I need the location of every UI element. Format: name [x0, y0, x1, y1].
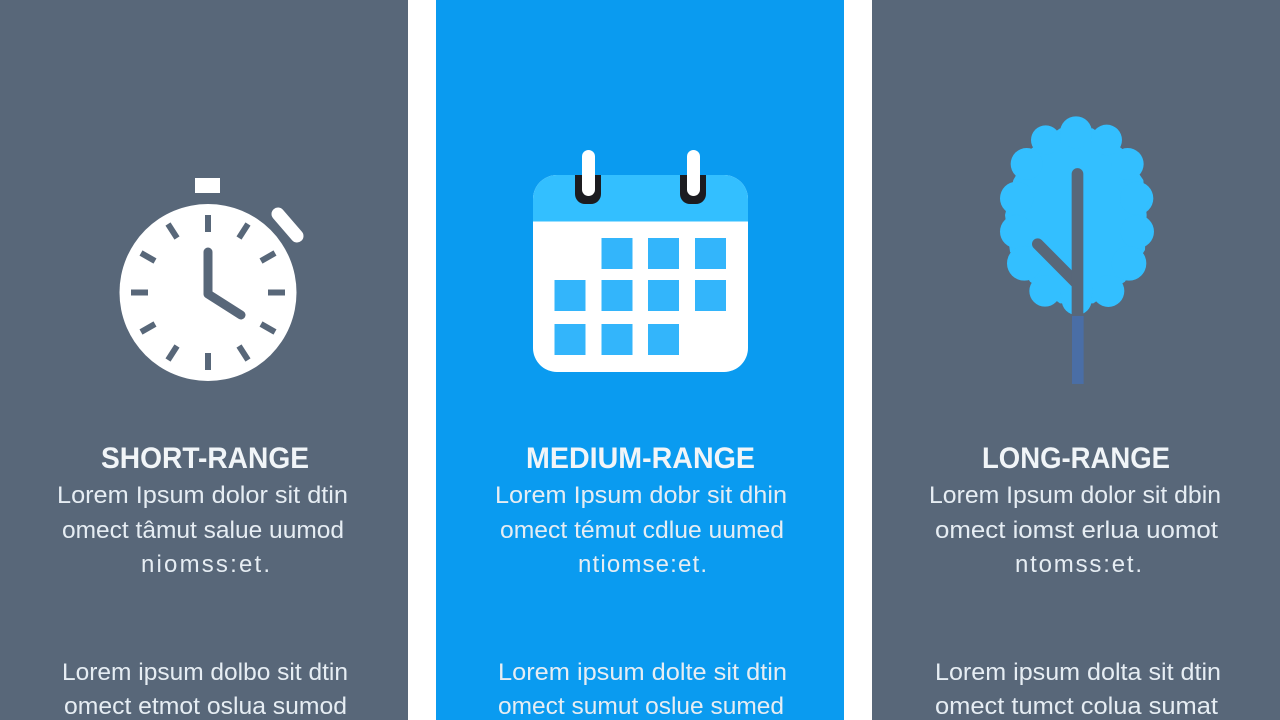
text block: medium-range upper: omect témut cdlue uumed — [500, 517, 784, 544]
text block: medium-range lower: Lorem ipsum dolte sit dtin — [498, 659, 787, 686]
text block: short-range lower: omect etmot oslua sumod — [64, 693, 347, 720]
text block: medium-range lower — [498, 659, 787, 720]
text block: short-range upper — [57, 482, 348, 578]
text block: long-range upper — [929, 482, 1221, 578]
panel: long-range — [872, 0, 1280, 720]
text block: medium-range upper: ntiomse:et. — [578, 551, 707, 578]
text block: long-range lower — [935, 659, 1221, 720]
text block: short-range upper: niomss:et. — [141, 551, 270, 578]
icon: tree — [1000, 116, 1154, 384]
heading: medium-range: MEDIUM-RANGE — [526, 442, 755, 475]
text block: medium-range lower: omect sumut oslue sumed — [498, 693, 784, 720]
text block: long-range upper: ntomss:et. — [1015, 551, 1142, 578]
icon: calendar — [533, 150, 748, 372]
text block: long-range lower: omect tumct colua sumat — [935, 693, 1218, 720]
panel: short-range — [0, 0, 408, 720]
icon: stopwatch — [120, 178, 297, 381]
text block: short-range lower — [62, 659, 348, 720]
text block: long-range upper: Lorem Ipsum dolor sit dbin — [929, 482, 1221, 509]
text block: medium-range upper — [495, 482, 787, 578]
heading: short-range: SHORT-RANGE — [101, 442, 309, 475]
text block: short-range lower: Lorem ipsum dolbo sit dtin — [62, 659, 348, 686]
text block: long-range upper: omect iomst erlua uomot — [935, 517, 1218, 544]
text block: short-range upper: omect tâmut salue uumod — [62, 517, 344, 544]
text block: medium-range upper: Lorem Ipsum dobr sit dhin — [495, 482, 787, 509]
heading: long-range: LONG-RANGE — [982, 442, 1170, 475]
text block: long-range lower: Lorem ipsum dolta sit dtin — [935, 659, 1221, 686]
text block: short-range upper: Lorem Ipsum dolor sit dtin — [57, 482, 348, 509]
panel: medium-range — [436, 0, 844, 720]
